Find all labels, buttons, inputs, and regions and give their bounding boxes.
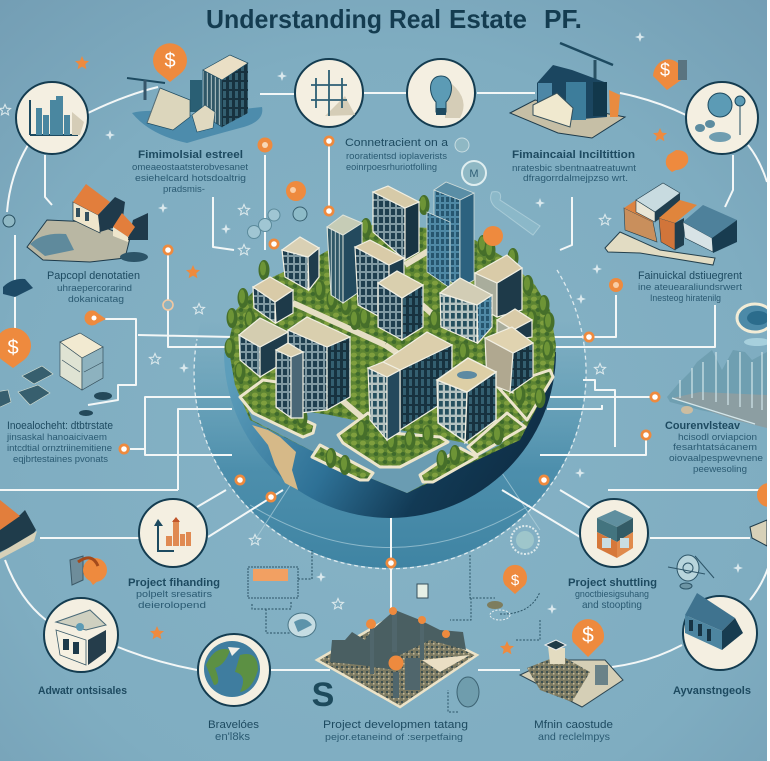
compass gadget [668,555,714,589]
text: main case study: Mfnin caostude [534,719,613,731]
illustration: dollar sign sculpture: S [312,676,334,714]
title: Real [389,4,441,34]
text: financial estate [132,149,248,195]
building: small right [497,309,532,340]
illustration: right edge platform [750,520,767,546]
text: financial estate: esiehelcard hotsdoaltrig [135,173,246,184]
text: project financing [128,577,220,611]
text: main case study: and reclelmpys [538,731,610,743]
circle icon: bar chart [16,82,88,154]
illustration: chart box with dotted links [248,550,316,637]
text: project development: Project developmen tatang [323,719,468,731]
text: courses: oiovaalpespwevnene [669,453,763,464]
text: project denotation: Papcopl denotatien [47,270,140,282]
text: indicators: intcdtial ornztriinemitiene [7,443,112,454]
text: connection: eoinrpoesrhuriotfolling [346,162,437,173]
circle icon: project financing chart [139,499,207,567]
building: center front [378,271,423,340]
text: project financing: deierolopend [138,600,206,611]
pin: right edge [757,483,770,507]
decorations: stars [0,32,743,654]
building: dark tall [373,186,419,260]
globe hemisphere [224,352,556,518]
pin: small bottom dollar: $ [511,572,520,589]
text: courses [665,420,763,475]
text: project development: pejor.etaneind of :serpetfaing [325,732,463,743]
circle icon: coins and balloons [686,82,758,154]
node dots [118,136,660,568]
text: project shuttling [568,577,657,611]
text: project shuttling: Project shuttling [568,577,657,589]
building: large center front [368,332,452,440]
text: project financing: polpelt sresatirs [136,589,212,600]
title: PF. [544,4,582,34]
pin: top-right dollar [653,59,687,90]
text: drawbacks: Bravelóes [208,719,260,731]
text: indicators [6,420,113,465]
text: courses: fesarhtatsácanem [673,442,757,453]
trees [224,195,554,475]
text: project denotation: uhraepercorarind [57,283,132,294]
building: center mid [355,240,404,322]
illustration: bottom center model city [317,584,477,707]
planters [240,370,553,482]
circle icon: cube building [580,499,648,567]
roads [293,250,445,420]
building: large left tower [276,317,350,418]
disk behind globe with dashed outline [194,176,586,569]
illustration: crane and towers top center [510,43,625,138]
decorations: orange pins and balloons [3,138,688,292]
title: Estate [449,4,527,34]
illustration: right orange and blue buildings [605,183,737,265]
text: financial estate: omeaeostaatsterobvesanet [132,162,248,173]
text: main case study [534,719,613,743]
text: financial estate: Fimimolsial estreel [138,149,243,161]
illustration: dotted links and badge [448,526,540,712]
text: financial development [638,270,742,304]
building: front right [437,358,496,443]
illustration: small car [3,279,33,297]
central globe with city [224,182,556,518]
building: back left [282,237,319,290]
text: project financing: Project fihanding [128,577,220,589]
front road [245,402,525,493]
illustration: device cards [0,366,53,408]
text: project shuttling: and stoopting [582,599,642,611]
illustration: left orange-roofed houses [27,184,148,262]
building: right mid [440,278,492,343]
pin: left dollar [0,328,31,368]
text: courses: peewesoling [693,464,747,475]
building: left back [253,277,293,323]
title: Understanding [206,4,382,34]
text: financial institution [512,149,636,184]
continent [252,425,298,490]
illustration: top-left building cluster [127,55,262,143]
illustration: storage box [60,333,112,416]
text: financial institution: nratesbic sbentnaatreatuwnt [512,163,636,174]
pin: large bottom dollar: $ [582,624,594,647]
building: blue glass tower [427,182,474,288]
text: project shuttling: gnoctbiesigsuhang [575,589,649,600]
title [206,4,582,34]
circle icon: house advantages [683,593,757,670]
circle icon: light bulb [407,59,475,127]
pin: top-left dollar [153,43,187,82]
pin: top-right dollar: $ [660,60,670,80]
text: courses: Courenvlsteav [665,420,741,432]
illustration: bottom right plate [520,640,623,707]
pin: small bottom dollar [503,565,527,594]
text: indicators: Inoealocheht: dtbtrstate [7,420,113,432]
text: financial development: Fainuickal dstiuegrent [638,270,742,282]
text: financial institution: Fimaincaial Inciltittion [512,149,635,161]
circle icon: house top view [44,598,118,672]
circle icon: earth [198,634,270,706]
text: advantages right: Ayvanstngeols [673,685,751,697]
building: narrow blue [327,215,362,303]
text: drawbacks: en'l8ks [215,731,251,743]
text: drawbacks [208,719,260,743]
text: financial institution: dfragorrdalmejpzso wrt. [523,173,628,184]
pin: large bottom dollar [572,619,604,657]
text: financial development: ine ateuearaliundsrwert [638,282,742,293]
text: connection: rooratientsd ioplaverists [346,151,447,162]
illustration: bottom-left edge house [0,500,37,559]
illustration: ring device right edge [737,304,770,346]
building: right back [475,255,522,317]
text: courses: hcisodl orviapcion [678,432,757,443]
illustration: crystal city [667,350,767,428]
pin: orange clipboard [70,556,107,585]
pin: left dollar: $ [7,337,19,359]
island ground [228,225,556,493]
text: project development [323,719,468,743]
text: connection [345,137,449,173]
text: indicators: jinsaskal hanoaicivaem [6,432,107,443]
decorations: orange pins and balloons: M [469,168,479,180]
building: far right cream [485,327,533,393]
circle icon: network globe [295,59,363,127]
right page margin [767,0,770,761]
text: connection: Connetracient on a [345,137,449,149]
text: financial estate: pradsmis- [163,184,205,195]
text: financial development: Inesteog hiratenilg [650,293,721,304]
text: project denotation: dokanicatag [68,294,124,305]
connector lines [0,87,768,670]
text: indicators: eqjbrtestaines pvonats [13,454,108,465]
text: advantages left: Adwatr ontsisales [38,685,127,697]
pin: top-left dollar: $ [164,50,176,72]
building: left front [239,318,288,377]
pin: small orange left [84,310,106,326]
text: project denotation [47,270,140,305]
